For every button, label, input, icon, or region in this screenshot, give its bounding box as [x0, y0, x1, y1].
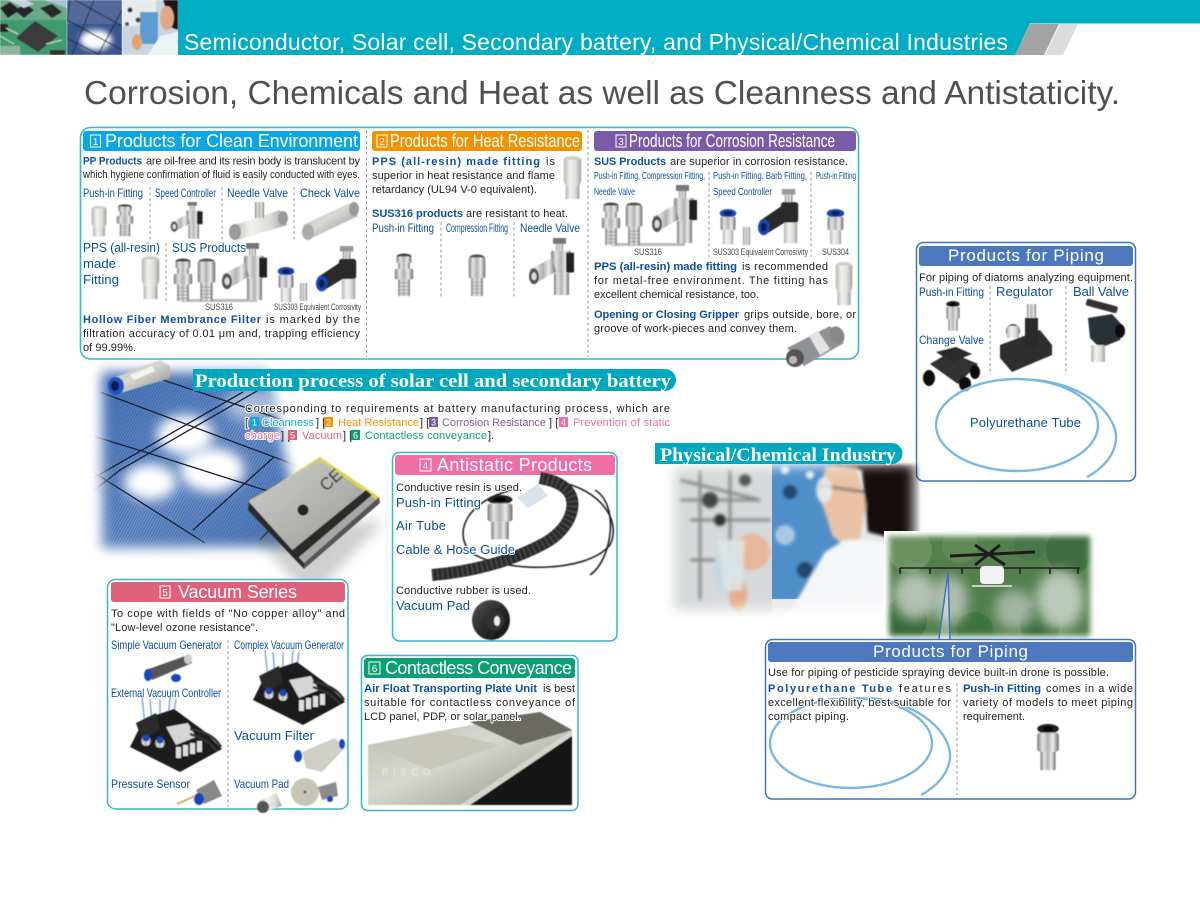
image: hollow fiber filter — [108, 360, 170, 395]
heading 4: 4 — [423, 461, 429, 472]
captions — [205, 302, 361, 312]
vacuum labels: Pressure Sensor — [111, 777, 190, 791]
text: manufacturing requirements: ] [ — [316, 417, 325, 429]
corrosion captions: SUS303 Equivalent Corrosivity — [713, 247, 808, 257]
heading 6: 6 — [372, 664, 378, 675]
image: cable guide and air tube — [432, 478, 613, 575]
PPS fitting image — [836, 262, 852, 305]
tube text: excellent flexibility, best suitable for — [768, 697, 951, 709]
heading 2: 2 — [379, 137, 385, 148]
text: manufacturing requirements: ]. — [488, 430, 494, 442]
heat labels: Compression Fitting — [446, 221, 508, 235]
vacuum intro: To cope with fields of "No copper alloy" and — [111, 608, 345, 620]
PPS text: retardancy (UL94 V-0 equivalent). — [372, 184, 537, 196]
panel: products for clean, heat and corrosion — [80, 128, 858, 367]
banner: production process: Production process of solar cell and secondary battery — [195, 372, 672, 392]
intro: Use for piping of pesticide spraying device built-in drone is possible. — [768, 667, 1109, 679]
fitting text: Push-in Fitting — [963, 683, 1041, 695]
vacuum labels — [111, 638, 344, 791]
intro text: are oil-free and its resin body is translucent by — [146, 156, 360, 168]
labels: Ball Valve — [1073, 284, 1129, 299]
product labels: Check Valve — [300, 186, 360, 200]
heading 5: Vacuum Series — [178, 582, 297, 602]
SUS product images — [142, 243, 356, 302]
image: polyurethane tube — [936, 379, 1116, 477]
filter text: filtration accuracy of 0.01 μm and, trapping efficiency — [83, 328, 360, 340]
section 1: clean environment — [82, 131, 361, 354]
PPS labels: PPS (all-resin) — [83, 240, 160, 255]
conveyance text: suitable for contactless conveyance of — [364, 697, 576, 709]
heading 1: 1 — [93, 137, 99, 148]
PPS text: superior in heat resistance and flame — [372, 170, 555, 182]
PPS recommended text: PPS (all-resin) made fitting — [594, 261, 737, 273]
corrosion captions: SUS316 — [634, 247, 662, 257]
PPS labels: Fitting — [83, 272, 119, 287]
antistatic text — [396, 482, 531, 613]
gripper text — [594, 309, 856, 335]
heading 3: Products for Corrosion Resistance — [629, 131, 835, 151]
image strip: lab researcher — [122, 0, 178, 55]
teal title band — [178, 0, 1200, 55]
heading 5: 5 — [162, 588, 168, 599]
vacuum intro — [111, 608, 345, 634]
intro text — [82, 156, 360, 181]
gripper text: groove of work-pieces and convey them. — [594, 323, 797, 335]
product labels — [83, 186, 360, 200]
text: manufacturing requirements: ] [ — [343, 430, 352, 442]
labels — [919, 284, 1129, 347]
vacuum labels: Complex Vacuum Generator — [234, 638, 344, 652]
heading 6: Contactless Conveyance — [385, 658, 572, 678]
conveyance text: LCD panel, PDP, or solar panel. — [364, 711, 521, 723]
panel: antistatic products — [392, 452, 617, 641]
PPS recommended text: is recommended — [742, 261, 828, 273]
vacuum labels: External Vacuum Controller — [111, 686, 221, 700]
corrosion labels: Push-in Fitting, Compression Fitting, — [594, 170, 705, 182]
vacuum labels: Vacuum Pad — [234, 777, 289, 791]
tube label: Polyurethane Tube — [970, 415, 1081, 430]
photo: lab researcher — [660, 460, 920, 625]
panel: products for piping (drone) — [766, 572, 1136, 799]
corrosion labels: Push-in Fitting, Barb Fitting, — [713, 170, 807, 182]
heading 4: Antistatic Products — [437, 455, 592, 475]
image strip: circuit board — [0, 0, 67, 55]
text: manufacturing requirements: 4 — [561, 418, 566, 428]
image: vacuum pad — [472, 600, 510, 640]
panel: vacuum series — [108, 580, 348, 813]
panel: products for piping (analysis) — [916, 242, 1136, 481]
text: manufacturing requirements: 2 — [326, 418, 331, 428]
image: air float plate — [368, 712, 572, 805]
header band — [0, 0, 1200, 55]
PPS labels: made — [83, 256, 116, 271]
antistatic text: Conductive resin is used. — [396, 482, 522, 494]
light grey accent — [1045, 24, 1078, 55]
corrosion labels: Speed Controller — [713, 186, 772, 198]
heading 1: Products for Clean Environment — [105, 131, 358, 151]
heat labels: Needle Valve — [520, 221, 580, 235]
PPS text — [372, 156, 556, 196]
heading: Products for Piping — [948, 246, 1104, 265]
tube text — [768, 683, 952, 723]
product labels: Needle Valve — [227, 186, 288, 200]
PP product images — [92, 202, 359, 240]
image: battery — [248, 457, 385, 600]
image: push-in fitting — [1037, 724, 1059, 770]
PPS labels — [83, 240, 246, 287]
antistatic text: Push-in Fitting — [396, 495, 481, 510]
filter text: Hollow Fiber Membrance Filter — [83, 314, 262, 326]
text: manufacturing requirements: ] [ — [420, 417, 429, 429]
PPS recommended text: excellent chemical resistance, too. — [594, 289, 759, 301]
text: manufacturing requirements: Contactless conveyance — [365, 430, 487, 442]
corrosion labels: Needle Valve — [594, 186, 635, 198]
PPS text: is — [546, 156, 556, 168]
intro: For piping of diatoms analyzing equipment. — [919, 272, 1133, 284]
gripper image — [786, 324, 848, 367]
heading 2: Products for Heat Resistance — [390, 131, 580, 151]
corrosion captions: SUS304 — [822, 247, 849, 257]
section 2: heat resistance — [372, 131, 582, 298]
antistatic text: Vacuum Pad — [396, 598, 470, 613]
text: manufacturing requirements: Vacuum — [302, 430, 342, 442]
corrosion captions — [634, 247, 849, 257]
image: battery: CE — [316, 465, 346, 495]
pointer to drone — [939, 572, 950, 639]
PPS labels: SUS Products — [172, 240, 246, 255]
product images — [923, 298, 1125, 391]
banner: physical/chemical industry — [655, 443, 920, 625]
text: manufacturing requirements: 3 — [431, 418, 436, 428]
text: manufacturing requirements: Corrosion Resistance — [442, 417, 546, 429]
product labels: Push-in Fitting — [83, 186, 143, 200]
tube text: features — [899, 683, 952, 695]
vacuum labels: Simple Vacuum Generator — [111, 638, 222, 652]
SUS316 text: SUS316 products — [372, 208, 463, 220]
photo: drone over trees — [884, 531, 1094, 639]
image strip: solar panels — [67, 0, 122, 55]
fitting text — [963, 683, 1133, 723]
gripper text: grips outside, bore, or — [744, 309, 856, 321]
section 3: corrosion resistance — [594, 131, 856, 367]
text: manufacturing requirements: ] [ — [281, 430, 290, 442]
corrosion product images — [602, 185, 844, 246]
labels: Push-in Fitting — [919, 285, 984, 299]
PPS recommended text: for metal-free environment. The fitting has — [594, 275, 828, 287]
PPS text: PPS (all-resin) made fitting — [372, 156, 540, 168]
PPS fitting image — [564, 156, 581, 199]
text: manufacturing requirements: Cleanness — [262, 417, 314, 429]
heading: Products for Piping — [873, 642, 1028, 661]
captions: SUS316 — [205, 302, 233, 312]
heading 5 — [111, 582, 345, 602]
heat labels: Push-in Fitting — [372, 221, 434, 235]
conveyance text — [364, 683, 576, 723]
labels: Regulator — [996, 284, 1054, 299]
intro text: which hygiene confirmation of fluid is easily conducted with eyes. — [82, 169, 360, 181]
antistatic text: Conductive rubber is used. — [396, 585, 531, 597]
banner: physical/chemical industry: Physical/Chemical Industry — [660, 446, 897, 466]
photo: solar panels — [92, 362, 298, 558]
heading 3: 3 — [618, 137, 624, 148]
product labels: Speed Controller — [155, 186, 216, 200]
text: manufacturing requirements: Prevention of static — [573, 417, 670, 429]
main title: Corrosion, Chemicals and Heat as well as Cleanness and Antistaticity. — [84, 75, 1120, 112]
text: manufacturing requirements: 1 — [252, 418, 257, 428]
antistatic text: Air Tube — [396, 518, 446, 533]
gripper text: Opening or Closing Gripper — [594, 309, 740, 321]
captions: SUS303 Equivalent Corrosivity — [274, 302, 361, 312]
fitting text: requirement. — [963, 711, 1025, 723]
filter text: is marked by the — [266, 314, 360, 326]
text: manufacturing requirements: 5 — [290, 430, 295, 440]
heading — [919, 246, 1133, 266]
conveyance text: is best — [543, 683, 575, 695]
fitting text: comes in a wide — [1046, 683, 1133, 695]
conveyance text: Air Float Transporting Plate Unit — [364, 683, 537, 695]
text: manufacturing requirements: Corresponding to requirements at battery manufacturing process, which are — [245, 403, 670, 415]
text: manufacturing requirements: charge — [245, 430, 280, 442]
labels: Change Valve — [919, 333, 984, 347]
vacuum images — [130, 650, 345, 813]
SUS text: SUS Products — [594, 156, 666, 168]
text: manufacturing requirements: [ — [245, 417, 248, 429]
filter text — [83, 314, 360, 354]
fitting text: variety of models to meet piping — [963, 697, 1133, 709]
text: manufacturing requirements — [245, 403, 670, 442]
filter text: of 99.99%. — [83, 342, 136, 354]
text: manufacturing requirements: Heat Resistance — [338, 417, 419, 429]
text: manufacturing requirements: ] [ — [549, 417, 558, 429]
tube text: Polyurethane Tube — [768, 683, 892, 695]
corrosion labels — [594, 170, 856, 198]
vacuum intro: "Low-level ozone resistance". — [111, 622, 258, 634]
panel: contactless conveyance — [362, 656, 578, 810]
intro text: PP Products — [83, 156, 142, 168]
heading — [768, 642, 1133, 662]
vacuum labels: Vacuum Filter — [234, 728, 315, 743]
SUS316 text — [372, 208, 568, 220]
text: manufacturing requirements: 6 — [353, 430, 358, 440]
tube text: compact piping. — [768, 711, 849, 723]
antistatic text: Cable & Hose Guide — [396, 542, 515, 557]
heat labels — [372, 221, 580, 235]
SUS316 text: are resistant to heat. — [466, 208, 568, 220]
band title text: Semiconductor, Solar cell, Secondary battery, and Physical/Chemical Industries — [184, 29, 1008, 55]
grey accent — [1015, 24, 1059, 55]
SUS text: are superior in corrosion resistance. — [670, 156, 848, 168]
corrosion labels: Push-in Fitting — [816, 170, 856, 182]
PPS recommended text — [594, 261, 828, 301]
image: polyurethane tube — [770, 698, 950, 795]
heat product images — [395, 238, 574, 296]
image: air float plate: PISCO — [382, 767, 430, 777]
